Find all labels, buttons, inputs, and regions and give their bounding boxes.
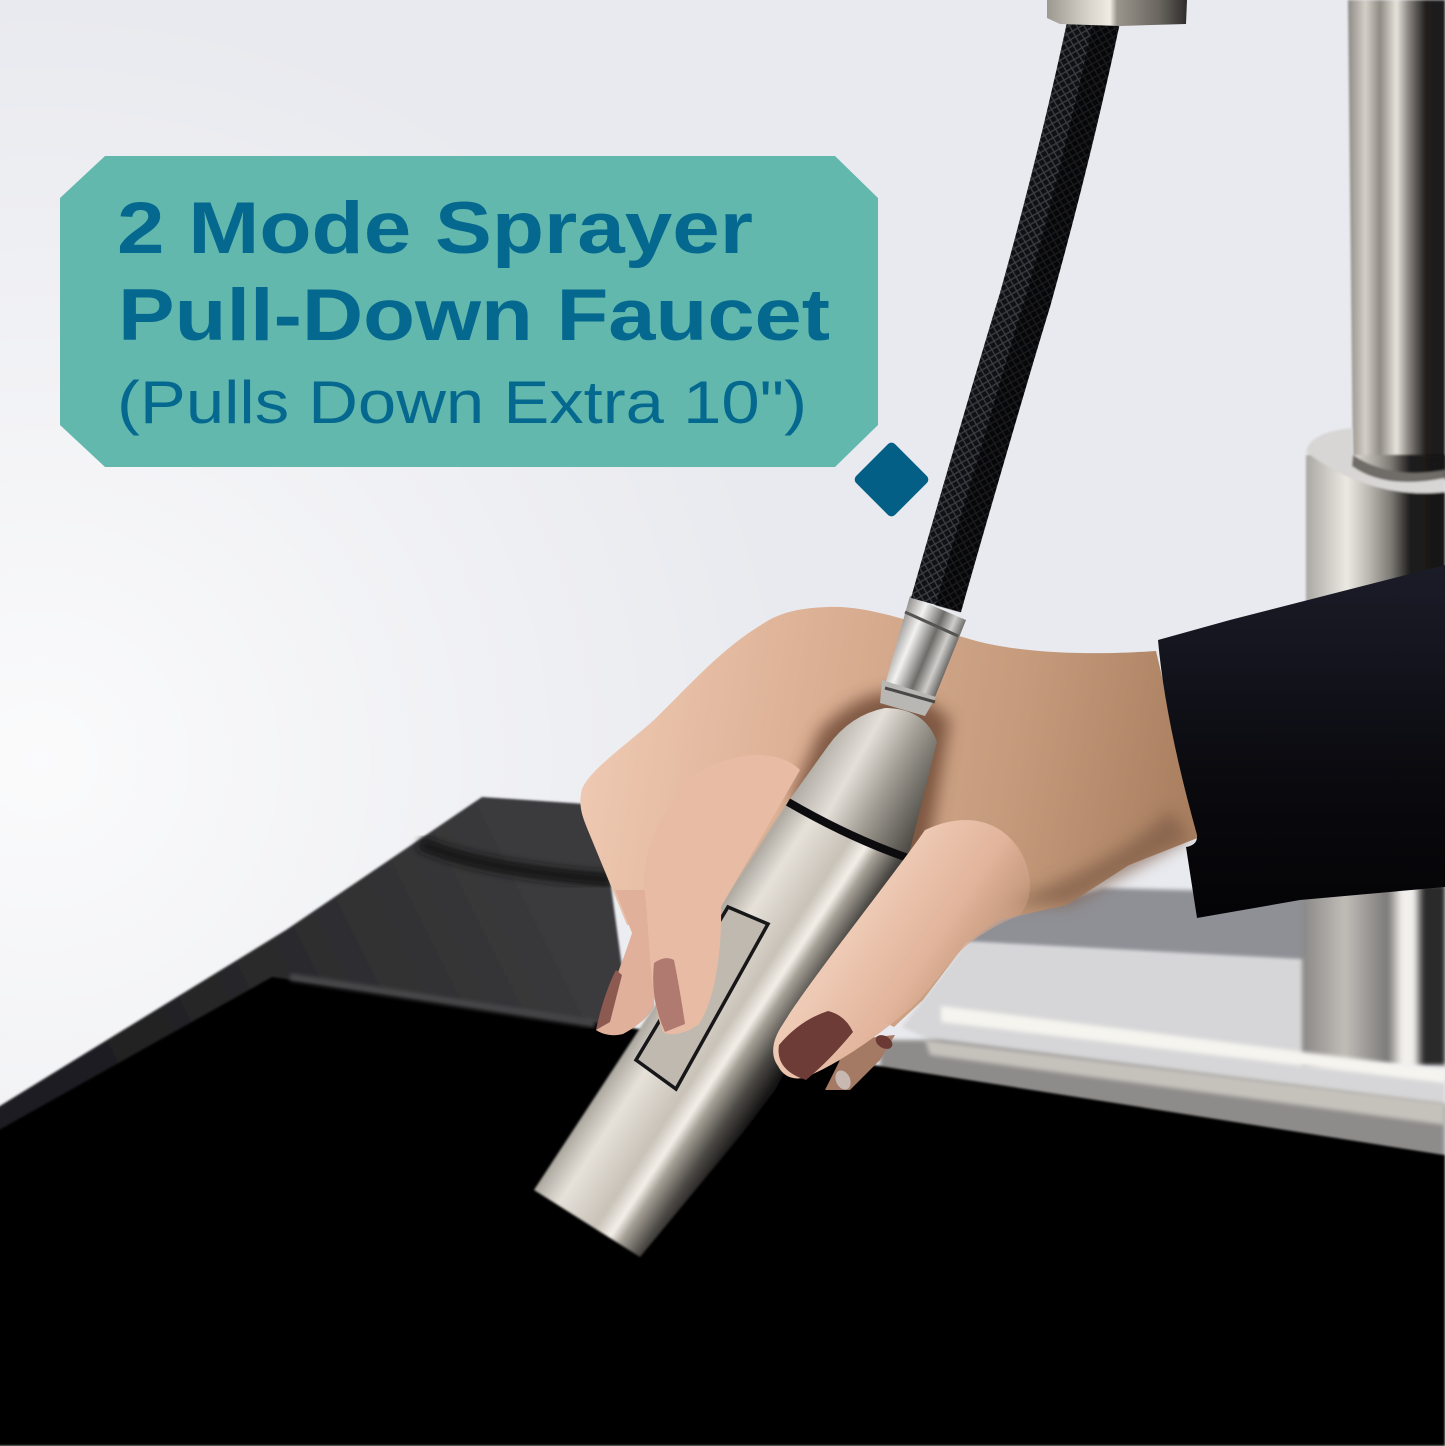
hidden fingertips xyxy=(825,1032,895,1092)
plate lower highlight xyxy=(925,1040,1445,1125)
hand shadow xyxy=(1000,810,1190,905)
sprayer button xyxy=(636,907,768,1089)
subheading: (Pulls Down Extra 10") xyxy=(117,369,807,436)
hose top connector xyxy=(1047,0,1187,26)
callout panel xyxy=(60,156,878,467)
faucet upper column xyxy=(1348,0,1445,480)
deck plate xyxy=(902,942,1445,1115)
deck groove xyxy=(420,843,612,880)
sprayer body xyxy=(534,802,908,1257)
heading line 1: 2 Mode Sprayer xyxy=(117,188,753,269)
callout xyxy=(60,156,878,467)
plate lower bands xyxy=(880,1040,1445,1157)
thumb xyxy=(773,820,1030,1078)
hose xyxy=(936,20,1106,609)
heading line 2: Pull-Down Faucet xyxy=(118,275,830,356)
index fingernail xyxy=(653,958,685,1032)
sink deck xyxy=(0,797,640,1200)
back fingernail xyxy=(596,970,622,1030)
faucet lower column xyxy=(1302,885,1445,1065)
sprayer neck xyxy=(880,596,966,716)
faucet collar xyxy=(1306,428,1445,605)
sink basin xyxy=(0,977,1445,1446)
sleeve xyxy=(1158,565,1445,918)
hand back xyxy=(580,607,1200,1027)
back finger xyxy=(596,890,660,1035)
plate bright edge xyxy=(941,1006,1445,1083)
sprayer shadow on hand xyxy=(790,692,950,870)
sprayer ring xyxy=(788,802,908,858)
back deck strip xyxy=(960,888,1310,962)
sprayer dome xyxy=(788,708,937,858)
callout diamond marker xyxy=(853,441,930,518)
basin rim xyxy=(290,977,595,1024)
index finger xyxy=(644,755,800,1034)
thumb nail xyxy=(779,1011,853,1080)
